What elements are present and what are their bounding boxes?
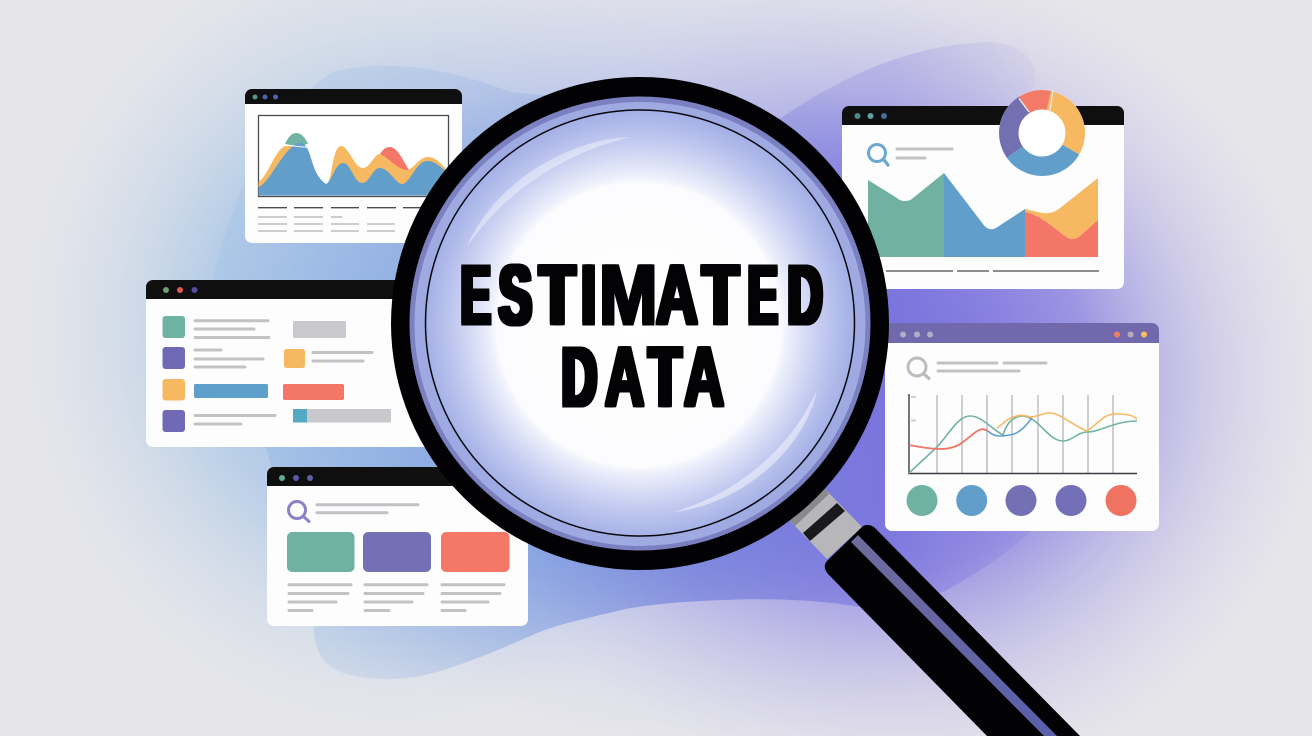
header lines (897, 149, 952, 158)
window dots (252, 94, 278, 100)
card text lines (289, 585, 504, 610)
window dots (279, 475, 313, 481)
title bar (245, 89, 462, 104)
blue bar (194, 384, 268, 398)
title bar (842, 106, 1124, 125)
legend circles (906, 485, 1136, 516)
title: T (540, 248, 574, 342)
panel: area chart window (245, 89, 462, 243)
light ring (414, 102, 866, 546)
progress bar (293, 409, 391, 422)
panel: cards window (267, 467, 528, 626)
title (461, 248, 824, 424)
title: S (499, 248, 532, 342)
line chart (909, 394, 1137, 474)
title: D (562, 330, 597, 424)
colour cards (287, 532, 510, 572)
title: T (703, 248, 738, 342)
icon: search (288, 502, 309, 522)
handle neck (790, 489, 862, 559)
title: E (748, 248, 777, 342)
table rows (258, 208, 432, 231)
black frame (391, 77, 889, 570)
handle stripe (851, 535, 1057, 736)
header lines (938, 363, 1046, 371)
highlight: bottom right (673, 390, 817, 512)
panel: line chart window (885, 323, 1159, 531)
layered area chart (258, 116, 448, 196)
title bar (885, 323, 1159, 343)
lens glass (426, 110, 854, 536)
title: E (461, 248, 491, 342)
title: I (582, 248, 596, 342)
window dots (163, 287, 198, 293)
title bar (267, 467, 528, 486)
title: M (599, 248, 657, 342)
background blob (213, 42, 1095, 679)
title: D (788, 248, 822, 342)
header lines (317, 505, 418, 513)
list text lines (195, 321, 372, 424)
window dots (900, 332, 1147, 338)
magnifying glass handle (790, 489, 1080, 736)
panel: list window (146, 280, 450, 447)
title: T (649, 330, 681, 424)
list squares (162, 316, 185, 432)
title: A (605, 330, 644, 424)
title: A (656, 248, 698, 342)
icon: search (868, 144, 888, 165)
window dots (854, 113, 887, 119)
magnifying glass lens (391, 77, 889, 570)
panel: dashboard window (842, 90, 1124, 289)
dark purple ring (410, 96, 870, 550)
highlight: top left (467, 137, 630, 247)
title: A (684, 330, 724, 424)
handle grip (825, 525, 1080, 736)
orange square (284, 349, 305, 368)
red bar (283, 384, 344, 400)
gray block (293, 321, 346, 338)
axis lines (886, 270, 1099, 272)
area chart (868, 173, 1098, 257)
title bar (146, 280, 450, 299)
icon: search (908, 358, 929, 378)
donut chart (999, 90, 1085, 176)
